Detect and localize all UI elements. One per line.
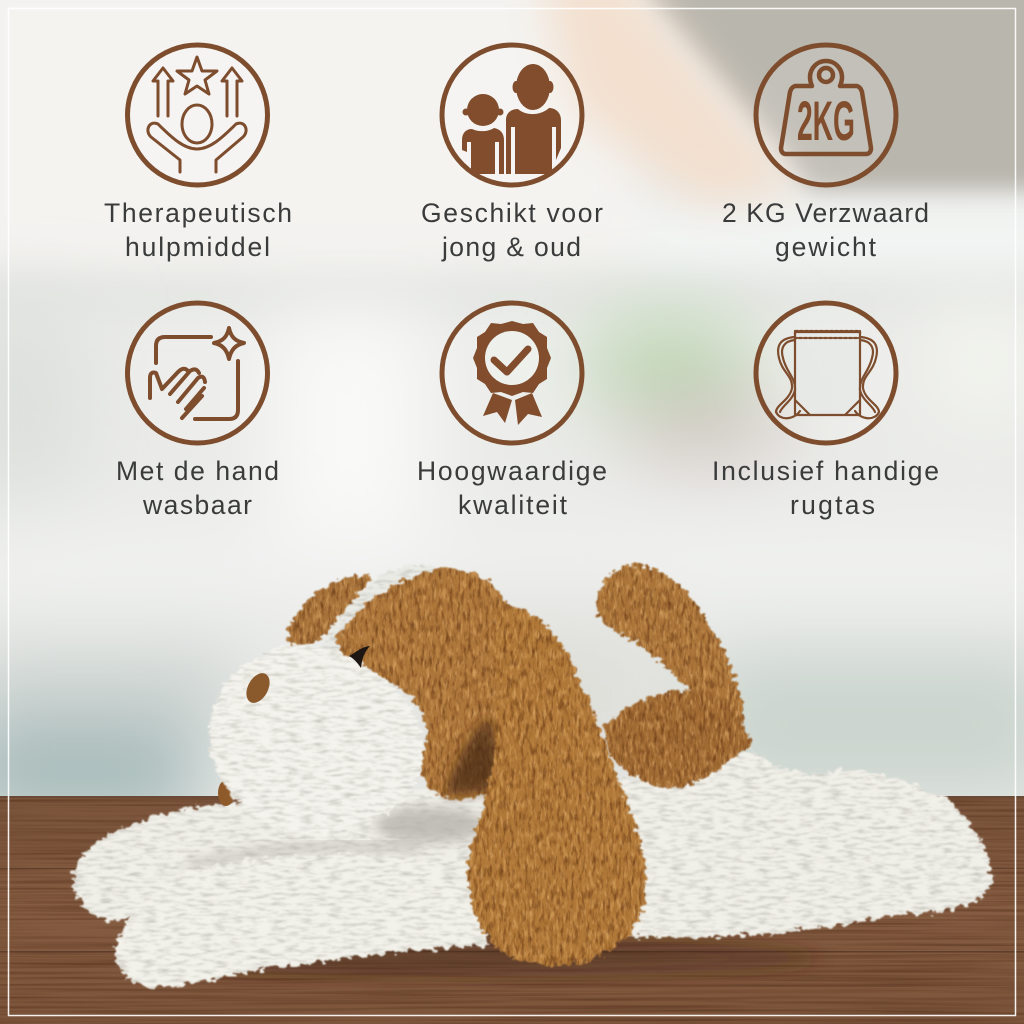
tail xyxy=(597,565,745,725)
icon: drawstring backpack xyxy=(756,303,896,443)
white muzzle xyxy=(210,644,424,835)
icon: 2 kg weight: 2KG xyxy=(797,89,855,152)
dark snout patch xyxy=(242,669,274,707)
icon: therapeutic aid xyxy=(128,45,268,185)
shadow under the dog xyxy=(140,940,820,976)
dog rear body xyxy=(560,750,993,937)
label: inclusief handige rugtas xyxy=(712,456,939,520)
label: therapeutisch hulpmiddel: hulpmiddel xyxy=(125,232,270,262)
label: inclusief handige rugtas: Inclusief handige xyxy=(712,456,939,486)
front leg xyxy=(116,855,490,988)
label: met de hand wasbaar: Met de hand xyxy=(116,456,279,486)
label: hoogwaardige kwaliteit xyxy=(417,456,607,520)
grey chest fur xyxy=(375,807,485,843)
label: met de hand wasbaar: wasbaar xyxy=(142,490,252,520)
eye xyxy=(349,646,370,668)
icon: hand washable xyxy=(128,303,268,443)
left brown head patch xyxy=(286,574,372,645)
crease between the two legs xyxy=(190,846,420,866)
label: geschikt voor jong en oud: Geschikt voor xyxy=(421,198,603,228)
label: geschikt voor jong en oud xyxy=(421,198,603,262)
label: hoogwaardige kwaliteit: kwaliteit xyxy=(458,490,568,520)
rear front leg xyxy=(73,785,500,920)
icon: 2 kg weight xyxy=(756,45,896,185)
long ear xyxy=(469,608,646,966)
brown chin tuft xyxy=(218,780,234,806)
label: geschikt voor jong en oud: jong & oud xyxy=(441,232,581,262)
brown head xyxy=(336,568,525,800)
white head blaze xyxy=(320,564,435,653)
plush dog xyxy=(73,564,993,988)
label: 2 kg verzwaard gewicht xyxy=(722,198,929,262)
brown back patch xyxy=(605,690,752,787)
label: 2 kg verzwaard gewicht: 2 KG Verzwaard xyxy=(722,198,929,228)
label: therapeutisch hulpmiddel: Therapeutisch xyxy=(104,198,292,228)
icon: child and adult xyxy=(442,45,582,185)
label: 2 kg verzwaard gewicht: gewicht xyxy=(775,232,877,262)
label: met de hand wasbaar xyxy=(116,456,279,520)
icon: quality rosette xyxy=(442,303,582,443)
dark fold under the head xyxy=(445,715,505,795)
label: therapeutisch hulpmiddel xyxy=(104,198,292,262)
label: inclusief handige rugtas: rugtas xyxy=(790,490,875,520)
wooden table xyxy=(0,796,1024,1024)
label: hoogwaardige kwaliteit: Hoogwaardige xyxy=(417,456,607,486)
